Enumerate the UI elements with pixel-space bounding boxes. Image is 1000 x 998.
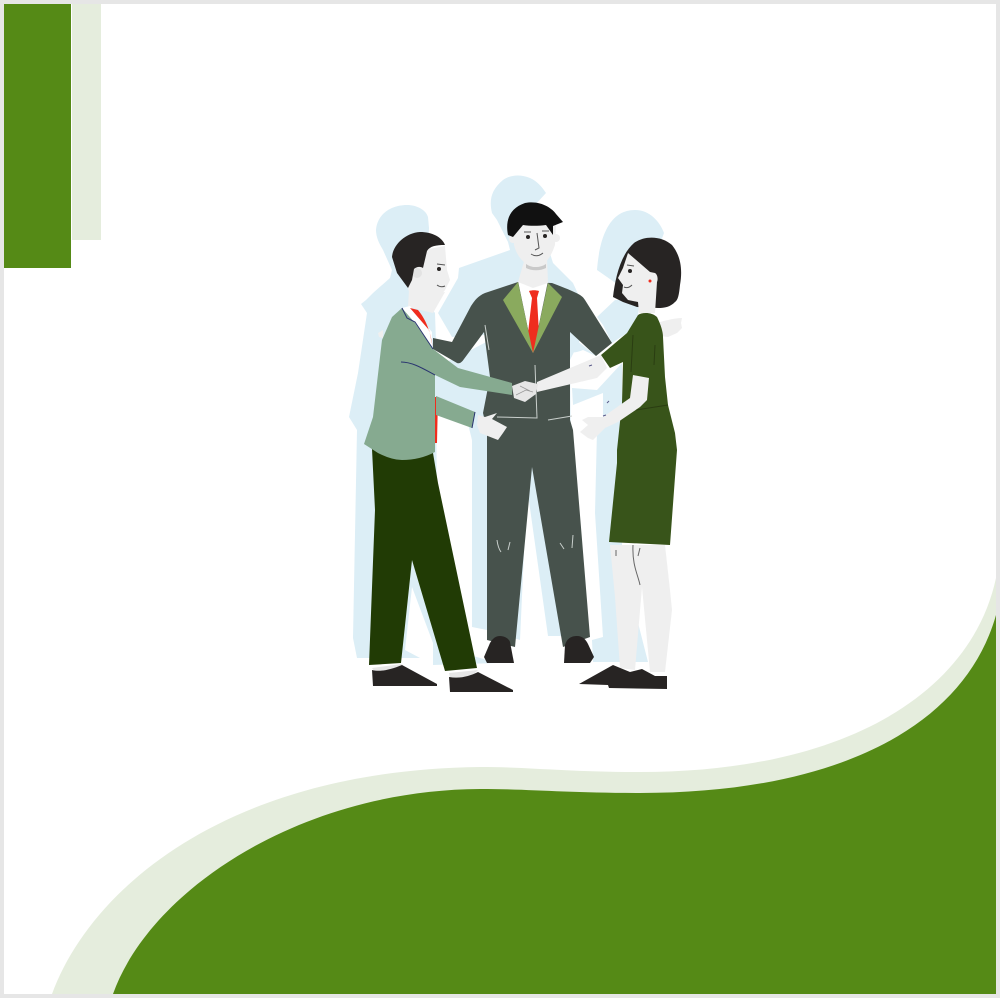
hands behind the figures [378,318,682,338]
figure: centre man [433,202,612,663]
figure: woman [512,238,681,689]
neck and head [518,258,548,288]
neck and face [613,238,681,308]
lapels [503,282,562,353]
illustration: three colleagues shaking hands [349,176,682,692]
legs [610,545,672,672]
jacket [436,396,475,428]
arms and handshake [537,355,607,392]
shoes [579,665,667,689]
shoes [484,636,514,663]
blue fill between the arms [436,360,490,441]
shoes [372,665,437,686]
light blue shadow figures [349,176,664,665]
figure: left man [364,232,513,692]
corner accent bars [4,4,101,268]
socks [372,664,478,678]
trousers [369,449,477,671]
bottom wave decoration [52,578,996,994]
dress [601,313,677,545]
lower hand [477,413,507,440]
red tie [528,290,539,353]
knee creases [497,535,573,552]
collar and red scarf [402,306,432,349]
